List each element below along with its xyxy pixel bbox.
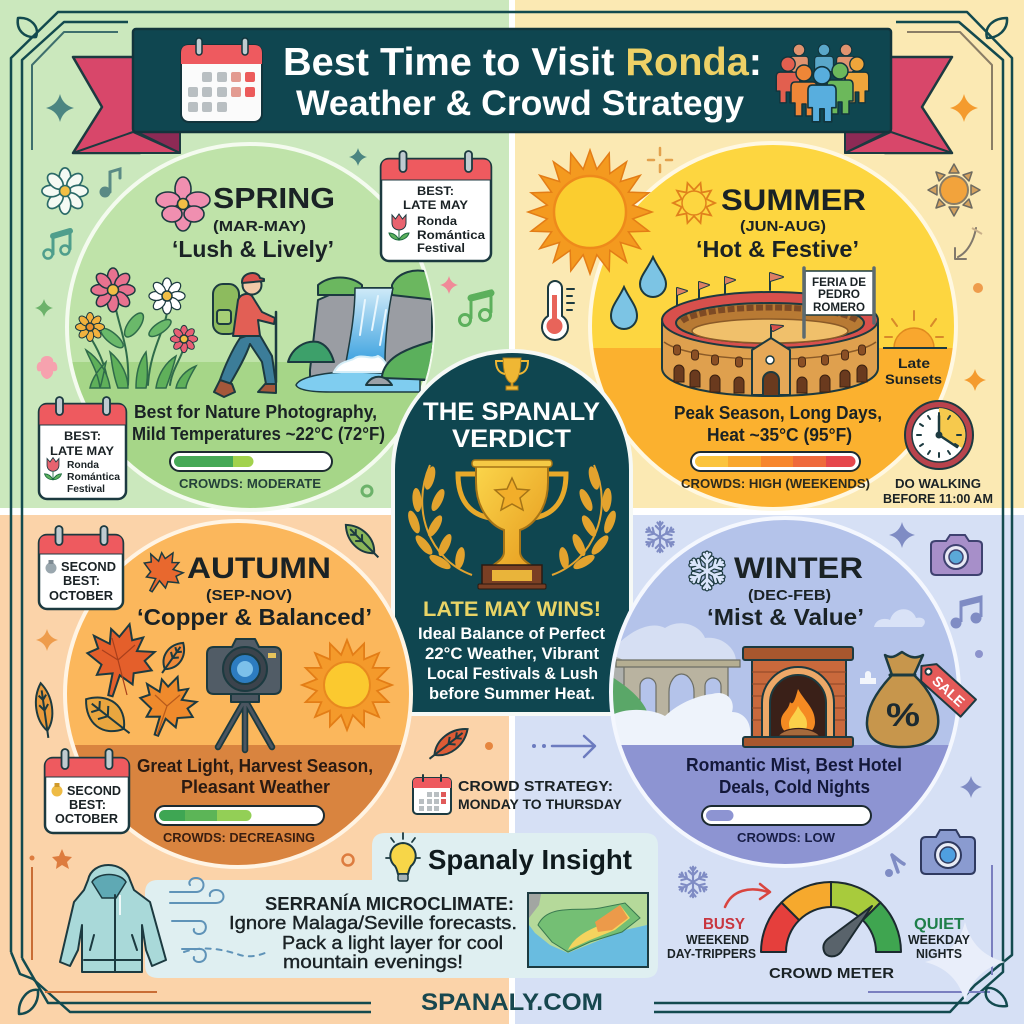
summer description: Heat ~35°C (95°F) bbox=[707, 424, 852, 445]
icon: sale tag: SALE bbox=[929, 672, 968, 710]
crowd bar: low bbox=[702, 806, 871, 825]
icon: autumn leaf heading bbox=[134, 543, 190, 601]
spring tagline: ‘Lush & Lively’ bbox=[172, 236, 334, 262]
calendar card: best late May bottom: BEST: bbox=[64, 429, 101, 443]
snowflake inner tint bbox=[689, 553, 725, 589]
background: spring quadrant bbox=[0, 0, 509, 508]
calendar card: second best bottom bbox=[45, 749, 129, 833]
sign: Feria de Pedro Romero: ROMERO bbox=[813, 302, 865, 314]
summer circle bbox=[585, 143, 965, 509]
verdict body: Ideal Balance of Perfect bbox=[418, 624, 605, 643]
autumn heading: AUTUMN bbox=[187, 552, 331, 585]
icon: late sunset bbox=[883, 311, 947, 387]
summer tagline: ‘Hot & Festive’ bbox=[696, 236, 859, 262]
crowd label: CROWDS: MODERATE bbox=[179, 476, 321, 491]
icon: big sun bbox=[528, 150, 652, 274]
title text bbox=[283, 41, 762, 123]
icon: small trophy bbox=[496, 358, 528, 390]
icon: jacket bbox=[60, 865, 166, 972]
icon: blue camera bbox=[921, 830, 975, 874]
verdict body: 22°C Weather, Vibrant bbox=[425, 644, 599, 663]
crowd strategy bbox=[413, 775, 623, 814]
title text: Weather & Crowd Strategy bbox=[296, 84, 745, 123]
autumn circle bbox=[60, 521, 420, 870]
autumn months: (SEP-NOV) bbox=[206, 587, 292, 604]
sign: Feria de Pedro Romero: FERIA DE bbox=[812, 277, 866, 289]
icon: crowd of people bbox=[776, 44, 869, 122]
illustration: fall leaves bbox=[77, 616, 204, 745]
title banner bbox=[73, 29, 952, 153]
calendar card: best late May bottom: Ronda bbox=[67, 460, 99, 471]
banner plate bbox=[133, 29, 891, 132]
winter description bbox=[686, 754, 902, 797]
crowd strategy text: MONDAY TO THURSDAY bbox=[458, 796, 623, 812]
verdict body: Local Festivals & Lush bbox=[427, 664, 598, 683]
spring description bbox=[132, 401, 385, 444]
crowd bar: moderate bbox=[170, 452, 332, 471]
calendar card: best late May bottom: LATE MAY bbox=[50, 444, 114, 458]
winter decorations bbox=[532, 522, 983, 897]
title text: Best Time to Visit Ronda: bbox=[283, 41, 762, 84]
winter heading: WINTER bbox=[734, 552, 863, 585]
insight body: Pack a light layer for cool bbox=[282, 933, 503, 953]
icon: purple camera bbox=[931, 535, 982, 575]
calendar card: best late May top: Ronda bbox=[417, 214, 457, 228]
icon: snowflake heading bbox=[689, 553, 725, 589]
verdict arch bbox=[393, 351, 631, 714]
calendar card: best late May top: Festival bbox=[417, 241, 465, 255]
cloud bbox=[874, 609, 925, 627]
sign: Feria de Pedro Romero: PEDRO bbox=[818, 289, 860, 301]
busy label bbox=[667, 916, 756, 961]
insight body: Ignore Malaga/Seville forecasts. bbox=[229, 913, 517, 933]
illustration: hiker bbox=[213, 273, 276, 397]
icon: white flower bbox=[42, 168, 88, 214]
icon: laurel right bbox=[552, 465, 618, 575]
verdict heading bbox=[423, 398, 600, 453]
calendar card: best late May top: LATE MAY bbox=[403, 198, 468, 212]
verdict body bbox=[418, 624, 605, 703]
calendar card: second best top: OCTOBER bbox=[49, 589, 113, 603]
gauge bbox=[761, 882, 901, 952]
quiet label bbox=[908, 916, 971, 961]
crowd label: CROWDS: HIGH (WEEKENDS) bbox=[681, 476, 870, 491]
verdict heading: VERDICT bbox=[452, 425, 571, 453]
quiet label: QUIET bbox=[914, 916, 964, 933]
calendar card: second best bottom: BEST: bbox=[69, 798, 106, 812]
calendar card: best late May top: BEST: bbox=[417, 184, 454, 198]
calendar card: best late May bottom: Romántica bbox=[67, 472, 120, 483]
icon: thermometer bbox=[542, 281, 574, 340]
arrow: busy to gauge bbox=[725, 884, 770, 907]
icon: small calendar bbox=[413, 775, 451, 814]
icon: sale tag bbox=[914, 657, 976, 717]
panel: winter bbox=[532, 518, 983, 897]
crowd strategy text bbox=[458, 778, 623, 812]
insight background bbox=[145, 833, 658, 978]
autumn decorations bbox=[30, 519, 493, 869]
busy label: BUSY bbox=[703, 916, 745, 933]
spring description: Mild Temperatures ~22°C (72°F) bbox=[132, 423, 385, 444]
calendar card: second best top: SECOND bbox=[61, 560, 116, 574]
crowd meter bbox=[667, 882, 971, 982]
panel: autumn bbox=[30, 519, 493, 870]
insight heading: Spanaly Insight bbox=[428, 844, 632, 875]
illustration: waterfall bbox=[288, 271, 436, 392]
illustration: bridge in mist bbox=[612, 623, 750, 745]
faint sparkle corner bbox=[925, 922, 1005, 1002]
icon: clock bbox=[905, 401, 973, 469]
icon: calendar bbox=[181, 38, 262, 122]
winter description: Deals, Cold Nights bbox=[719, 776, 870, 797]
ribbon left bbox=[73, 57, 180, 153]
illustration: bullring bbox=[662, 273, 878, 396]
gauge needle bbox=[823, 906, 872, 956]
icon: late sunset: Late bbox=[898, 355, 930, 371]
icon: small sun by heading bbox=[673, 183, 715, 223]
verdict heading: THE SPANALY bbox=[423, 398, 600, 426]
summer months: (JUN-AUG) bbox=[740, 218, 826, 235]
calendar card: second best top bbox=[39, 526, 123, 609]
busy label: WEEKEND bbox=[686, 933, 749, 947]
background: winter quadrant bbox=[515, 515, 1024, 1024]
summer heading: SUMMER bbox=[721, 184, 866, 217]
illustration: fireplace bbox=[743, 647, 853, 747]
spring months: (MAR-MAY) bbox=[213, 218, 306, 235]
panel: summer bbox=[528, 94, 993, 509]
winter tagline: ‘Mist & Value’ bbox=[707, 604, 864, 630]
summer decorations bbox=[648, 94, 986, 391]
calendar card: second best bottom: SECOND bbox=[67, 784, 121, 798]
calendar card: second best bottom: OCTOBER bbox=[55, 812, 118, 826]
icon: late sunset: Sunsets bbox=[885, 371, 942, 387]
illustration: camera on tripod bbox=[207, 639, 281, 750]
icon: laurel left bbox=[406, 465, 472, 575]
illustration: wildflowers bbox=[75, 268, 198, 388]
quiet label: WEEKDAY bbox=[908, 933, 971, 947]
icon: money bag with percent bbox=[867, 652, 938, 747]
panel: the Spanaly verdict bbox=[393, 351, 631, 714]
verdict headline: LATE MAY WINS! bbox=[423, 598, 601, 621]
walking advice: BEFORE 11:00 AM bbox=[883, 491, 993, 506]
crowd bar: high bbox=[691, 452, 860, 471]
decorative sparkles and notes: spring bbox=[35, 94, 458, 496]
autumn description: Great Light, Harvest Season, bbox=[137, 755, 373, 776]
autumn description: Pleasant Weather bbox=[181, 776, 330, 797]
insight body: mountain evenings! bbox=[283, 952, 463, 972]
autumn tagline: ‘Copper & Balanced’ bbox=[137, 604, 372, 630]
sign: Feria de Pedro Romero bbox=[804, 268, 874, 337]
crowd label: CROWDS: DECREASING bbox=[163, 830, 315, 845]
walking advice bbox=[883, 476, 993, 506]
walking advice: DO WALKING bbox=[895, 476, 981, 491]
winter circle outline bbox=[611, 518, 959, 866]
icon: pink blossom bbox=[156, 177, 210, 231]
icon: gold trophy bbox=[458, 460, 566, 589]
icon: music notes spring bbox=[44, 169, 491, 326]
map of Andalusia bbox=[528, 893, 648, 967]
panel: spring bbox=[39, 144, 491, 512]
crowd bar: decreasing bbox=[155, 806, 324, 825]
small white object bbox=[860, 671, 876, 684]
footer site name: SPANALY.COM bbox=[421, 989, 603, 1016]
icon: autumn sun bbox=[302, 640, 392, 730]
calendar card: best late May bottom: Festival bbox=[67, 484, 105, 495]
ribbon right bbox=[845, 57, 952, 153]
crowd strategy text: CROWD STRATEGY: bbox=[458, 778, 613, 795]
insight body: SERRANÍA MICROCLIMATE: bbox=[265, 893, 514, 914]
winter circle bbox=[605, 518, 965, 870]
spring heading: SPRING bbox=[213, 183, 335, 215]
autumn description bbox=[137, 755, 373, 797]
summer description: Peak Season, Long Days, bbox=[674, 402, 882, 423]
winter months: (DEC-FEB) bbox=[748, 587, 831, 604]
panel: Spanaly insight bbox=[60, 833, 658, 978]
icon: water drops bbox=[611, 257, 666, 329]
summer description bbox=[674, 402, 882, 445]
quiet label: NIGHTS bbox=[916, 947, 962, 961]
winter description: Romantic Mist, Best Hotel bbox=[686, 754, 902, 775]
background: autumn quadrant bbox=[0, 515, 509, 1024]
spring circle bbox=[60, 144, 440, 512]
insight body bbox=[229, 893, 517, 972]
crowd label: CROWDS: LOW bbox=[737, 830, 836, 845]
calendar card: best late May top bbox=[381, 151, 491, 261]
icon: light bulb bbox=[386, 833, 420, 881]
background: summer quadrant bbox=[515, 0, 1024, 508]
calendar card: best late May bottom bbox=[39, 397, 126, 499]
calendar card: best late May top: Romántica bbox=[417, 228, 485, 242]
icon: wind lines bbox=[170, 878, 265, 962]
calendar card: second best top: BEST: bbox=[63, 574, 100, 588]
spring description: Best for Nature Photography, bbox=[134, 401, 377, 422]
busy label: DAY-TRIPPERS bbox=[667, 947, 756, 961]
verdict body: before Summer Heat. bbox=[429, 684, 595, 703]
icon: money bag with percent: % bbox=[886, 697, 920, 733]
gauge title: CROWD METER bbox=[769, 965, 894, 982]
